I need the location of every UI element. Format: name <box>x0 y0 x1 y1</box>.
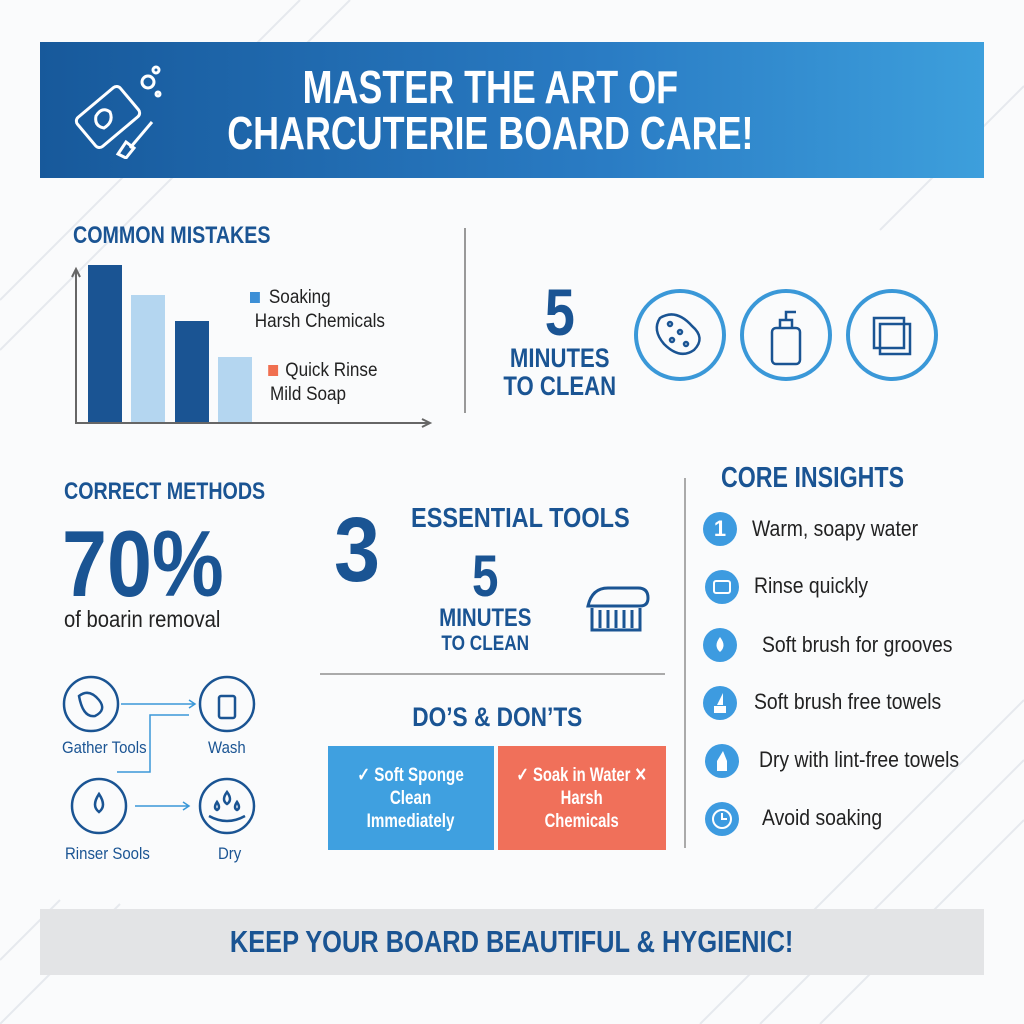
do box: ✓ Soft Sponge <box>358 765 464 786</box>
footer banner <box>40 909 984 975</box>
flow diagram: Wash <box>208 738 246 757</box>
do box: Clean <box>390 788 432 809</box>
panel: correct methods: CORRECT METHODS <box>64 478 265 505</box>
panel: core insights: Soft brush free towels <box>754 689 941 714</box>
panel: correct methods: of boarin removal <box>64 606 220 632</box>
title: CHARCUTERIE BOARD CARE! <box>227 107 753 159</box>
footer banner: KEEP YOUR BOARD BEAUTIFUL & HYGIENIC! <box>230 924 794 959</box>
panel: core insights: Rinse quickly <box>754 573 868 598</box>
panel: essential tools: TO CLEAN <box>441 632 529 655</box>
stat: 5 minutes: MINUTES <box>510 343 610 373</box>
panel: core insights <box>703 462 959 836</box>
panel: core insights: Dry with lint-free towels <box>759 747 959 772</box>
panel: common mistakes: Quick Rinse <box>285 360 377 381</box>
header banner <box>40 42 984 178</box>
legend: Harsh Chemicals <box>255 311 385 332</box>
panel: correct methods: 70% <box>62 511 224 616</box>
icons: tools circles <box>634 289 938 381</box>
panel: essential tools: 5 <box>472 544 498 609</box>
do box: Immediately <box>367 811 455 832</box>
stat: 5 minutes: TO CLEAN <box>504 371 616 401</box>
icon: brush <box>586 586 650 632</box>
panel: common mistakes <box>71 222 432 428</box>
title: MASTER THE ART OF <box>302 61 678 113</box>
panel: dos and donts <box>328 702 666 850</box>
flow diagram: Gather Tools <box>62 738 147 757</box>
dont box: ✓ Soak in Water ✕ <box>517 765 647 786</box>
panel: core insights: 1 <box>714 516 726 541</box>
legend <box>250 287 385 332</box>
dont box: Chemicals <box>545 811 619 832</box>
stat: 5 minutes: 5 <box>545 275 575 349</box>
flow diagram: Rinser Sools <box>65 844 150 863</box>
legend: Soaking <box>269 287 331 308</box>
dont box: Harsh <box>561 788 603 809</box>
title <box>227 61 753 159</box>
flow diagram <box>62 676 256 863</box>
icon: board and brush <box>74 66 162 159</box>
panel: core insights: Soft brush for grooves <box>762 632 952 657</box>
bar chart <box>71 265 432 428</box>
panel: core insights: Warm, soapy water <box>752 516 918 541</box>
panel: essential tools: ESSENTIAL TOOLS <box>411 502 630 533</box>
dont box <box>498 746 666 850</box>
panel: essential tools <box>334 499 650 655</box>
panel: essential tools: 3 <box>334 499 380 601</box>
panel: common mistakes: Mild Soap <box>270 384 346 405</box>
flow diagram: Dry <box>218 844 241 863</box>
do box <box>328 746 494 850</box>
panel: dos and donts: DO’S & DON’TS <box>412 702 582 732</box>
panel: core insights: CORE INSIGHTS <box>721 462 904 494</box>
panel: correct methods <box>62 478 265 632</box>
panel: essential tools: MINUTES <box>439 604 531 632</box>
heading: COMMON MISTAKES <box>73 222 271 249</box>
stat: 5 minutes <box>504 275 616 401</box>
panel: core insights: Avoid soaking <box>762 805 882 830</box>
